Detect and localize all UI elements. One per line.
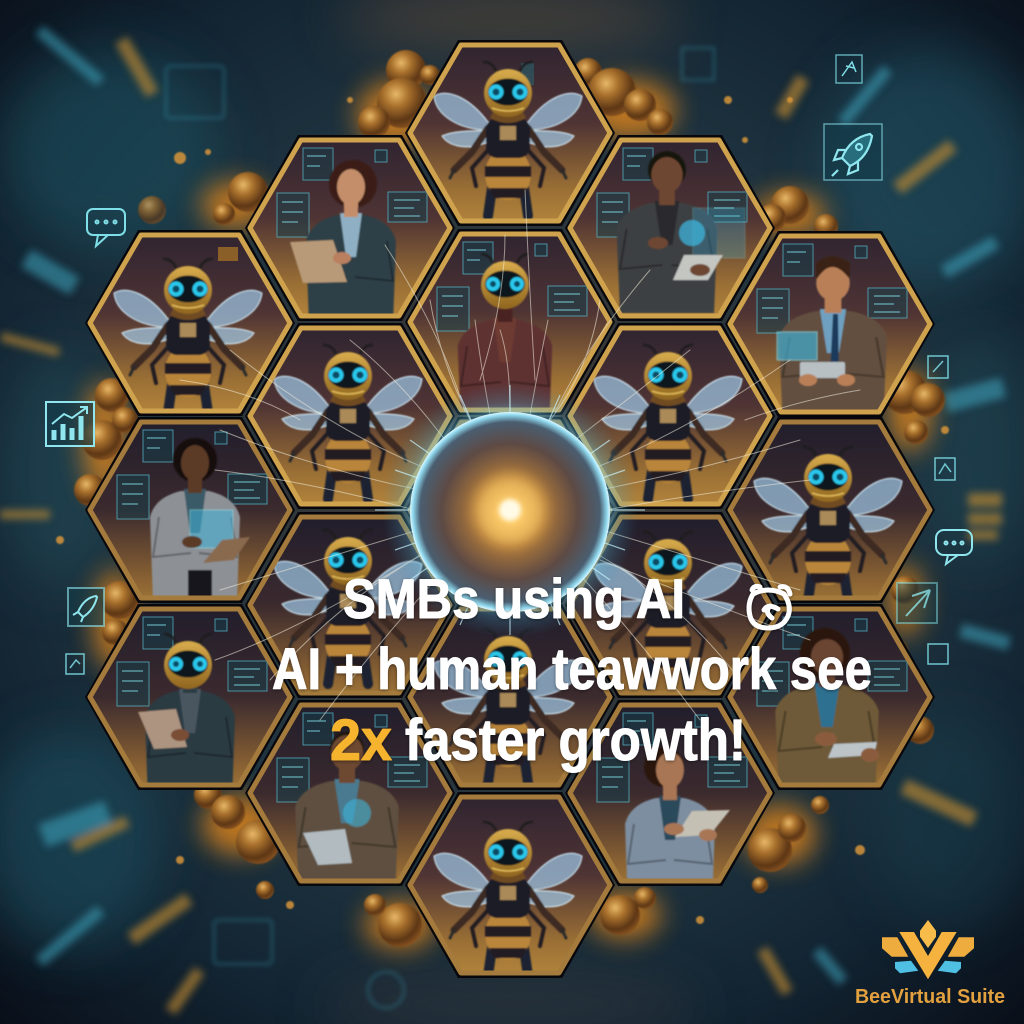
logo: BeeVirtual Suite — [855, 920, 1005, 1008]
headline text — [272, 567, 872, 773]
central glowing orb — [375, 382, 645, 638]
icon: growth chart — [46, 402, 94, 446]
logo wordmark: BeeVirtual Suite — [855, 985, 1005, 1008]
hex: bee-headed person lower left — [85, 604, 295, 790]
hexagon honeycomb — [80, 33, 940, 985]
icon: small panels right — [928, 356, 955, 664]
hex: man with tablet right — [725, 231, 935, 417]
icon: rocket left — [68, 588, 104, 626]
hex: centre behind orb — [405, 417, 615, 603]
hex: bee lower-right of orb — [565, 323, 775, 509]
hex: woman with afro left — [85, 417, 295, 603]
hex: bee under text left — [245, 512, 455, 698]
hex: bee top — [405, 40, 615, 226]
hex: bee centre lower — [405, 604, 615, 790]
faint background icons — [166, 48, 714, 1008]
icon: small panel left — [66, 654, 84, 674]
hex: bee lower-left of orb — [245, 323, 455, 509]
hex: woman lower right — [565, 700, 775, 886]
hex: man with hologram upper right — [565, 135, 775, 321]
energy filaments — [180, 190, 860, 720]
hex: bee under text right — [565, 512, 775, 698]
hex: woman with tablet upper left — [245, 135, 455, 321]
hex: bee-headed figure centre — [405, 229, 615, 415]
hex: man lower left — [245, 700, 455, 886]
gold sphere clusters — [56, 50, 949, 949]
icon: chat bubble top left — [87, 209, 125, 246]
icon: small rocket top — [836, 55, 862, 83]
headline text: 2x — [330, 708, 392, 773]
hex: bee right — [725, 417, 935, 603]
icon: white jar glyph — [749, 586, 790, 628]
icon: rocket top right — [824, 124, 882, 180]
headline text: AI + human teawwork see — [272, 637, 872, 702]
logo mark — [882, 920, 974, 979]
icon: chat bubble right — [936, 530, 972, 564]
icon: rocket right — [897, 583, 937, 623]
hex: person with afro lower right — [725, 604, 935, 790]
headline text: faster growth! — [405, 708, 746, 773]
headline text: SMBs using AI — [343, 567, 685, 630]
hex: bee bottom — [405, 792, 615, 978]
hex: bee left — [85, 230, 295, 416]
